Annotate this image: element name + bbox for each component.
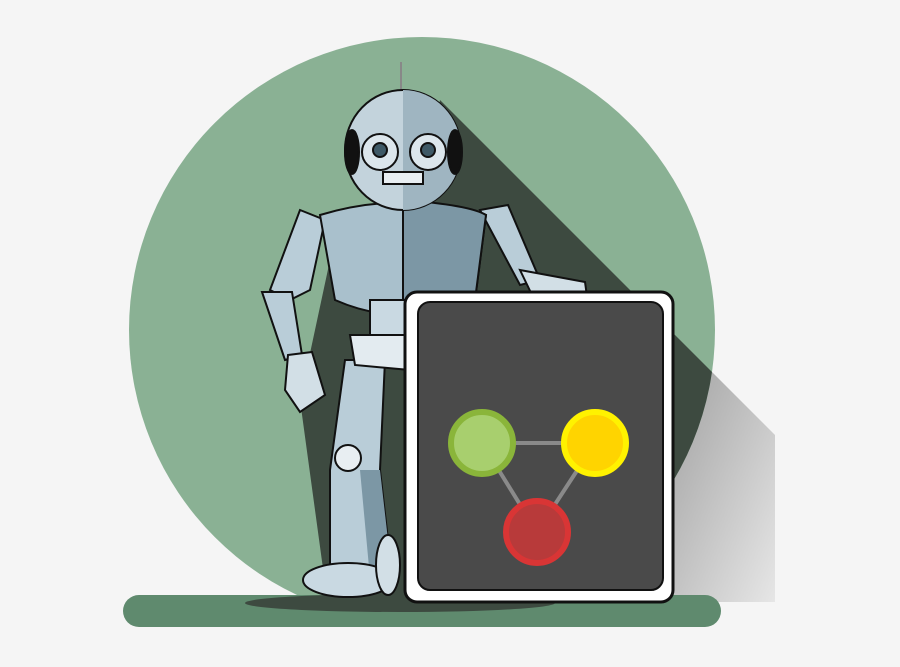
torso bbox=[320, 202, 486, 315]
antenna bbox=[400, 62, 402, 95]
background circle bbox=[129, 37, 715, 623]
left arm bbox=[270, 210, 325, 300]
ground bar bbox=[123, 595, 721, 627]
board screen bbox=[418, 302, 663, 590]
gray long shadow outside circle bbox=[660, 340, 775, 602]
connection lines bbox=[482, 443, 595, 532]
node: green bbox=[451, 412, 513, 474]
hand on board bbox=[520, 270, 590, 322]
ground shadow bbox=[245, 594, 555, 612]
head bbox=[345, 90, 461, 210]
board bbox=[405, 292, 673, 602]
legs bbox=[330, 360, 392, 580]
right arm bbox=[480, 205, 540, 285]
robot bbox=[262, 62, 590, 597]
node: yellow bbox=[564, 412, 626, 474]
illustration: robot with board bbox=[123, 37, 775, 627]
long shadow bbox=[302, 100, 712, 594]
node: red bbox=[506, 501, 568, 563]
